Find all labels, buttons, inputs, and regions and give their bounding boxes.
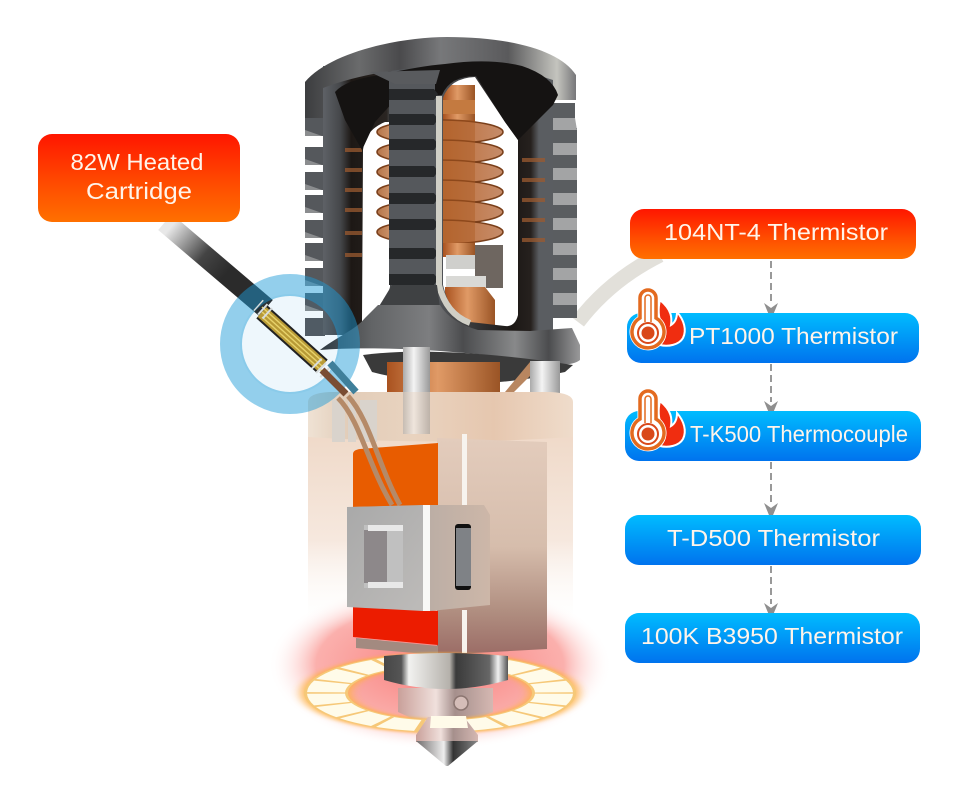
label: 82W heated cartridge: Cartridge [86,178,192,204]
label: T-K500 thermocouple: T-K500 Thermocouple [690,421,908,447]
copper heat break [377,85,503,325]
icon: thermometer and flame 1 [632,290,685,348]
side clearance slot [332,400,377,442]
blue highlight circle [231,285,349,403]
label: T-D500 thermistor [625,515,921,565]
label: T-D500 thermistor: T-D500 Thermistor [667,525,880,551]
red lower block [353,607,438,645]
icon: thermometer and flame 2 [632,391,685,449]
silicone sock clip: front face [347,505,423,611]
heat sink base flange [320,305,580,365]
cartridge wires [258,305,356,394]
copper reflection stripes [345,150,545,255]
translucent lower shell [308,430,573,630]
label: 82W heated cartridge [38,134,240,222]
nozzle hex body [398,688,493,722]
nozzle tip [416,716,478,766]
brown wires into block [338,396,400,505]
label: 100K B3950 thermistor [625,613,920,663]
block skirt [356,638,438,655]
heat sink top cap [305,37,576,150]
white seam [462,434,467,653]
heat sink body [323,66,553,335]
arrow 2 [764,364,778,418]
heat sink fins, right [552,103,577,318]
nozzle nut [384,653,508,689]
label: 82W heated cartridge: 82W Heated [70,149,204,175]
under-flange parts [363,347,573,397]
black heater cable [165,222,266,308]
heat sink fins, left [305,118,325,336]
orange heater block [353,443,438,507]
label: 104NT-4 thermistor [630,209,916,259]
label: PT1000 thermistor: PT1000 Thermistor [689,323,898,349]
silicone sock clip: side face [423,505,490,611]
label: 100K B3950 thermistor: 100K B3950 Thermistor [641,623,903,649]
glowing heat ring [326,660,554,726]
nozzle set screw [454,696,468,710]
shell top band [308,392,573,442]
label: T-K500 thermocouple [625,411,921,461]
arrow 4 [764,566,778,620]
arrow 1 [764,261,778,320]
silver rod through band [403,392,430,434]
red heat glow [268,580,612,750]
center column fins [370,70,470,323]
arrow 3 [764,462,778,520]
label: PT1000 thermistor [627,313,919,363]
white thermistor cable [578,255,660,322]
label: 104NT-4 thermistor: 104NT-4 Thermistor [664,219,888,245]
block rear side [437,438,547,655]
